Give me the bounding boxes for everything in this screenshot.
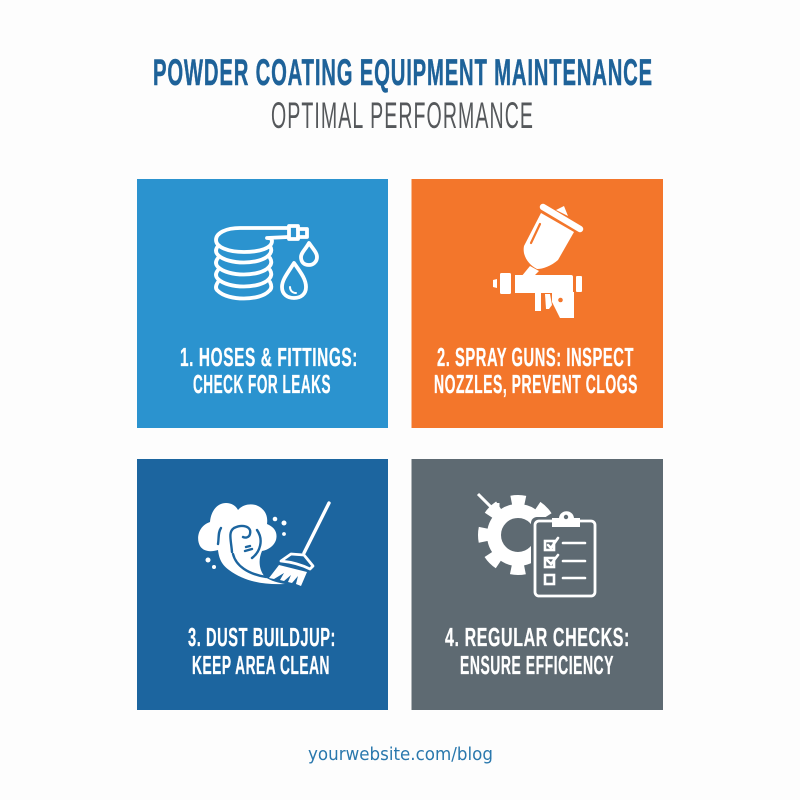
label 2: 2. SPRAY GUNS: INSPECT — [437, 342, 634, 372]
icon: gear and clipboard checklist — [478, 494, 599, 599]
icon: coiled hose with water drops — [216, 226, 317, 298]
panel: regular checks — [412, 459, 663, 710]
label 3: 3. DUST BUILDJUP: — [188, 622, 336, 652]
label 1: 1. HOSES & FITTINGS: — [180, 342, 358, 372]
panel: dust buildup: KEEP AREA CLEAN — [192, 650, 330, 680]
panel: hoses and fittings: CHECK FOR LEAKS — [193, 369, 331, 399]
icon: dust cloud and broom — [198, 503, 329, 586]
subtitle: OPTIMAL PERFORMANCE — [271, 95, 534, 136]
panel: spray guns — [412, 179, 663, 428]
panel: hoses and fittings — [137, 179, 388, 428]
panel: regular checks: ENSURE EFFICIENCY — [460, 650, 614, 680]
label 4: 4. REGULAR CHECKS: — [445, 622, 630, 652]
icon: spray gun — [493, 206, 582, 318]
footer url: yourwebsite.com/blog — [308, 744, 493, 765]
panel: dust buildup — [137, 459, 388, 710]
